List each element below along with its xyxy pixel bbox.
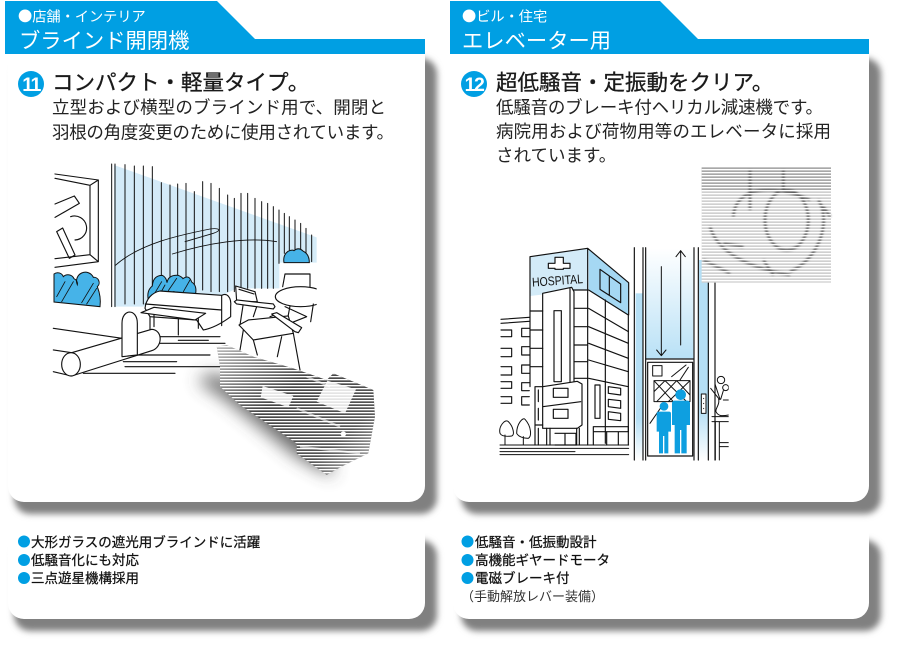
person: adult — [672, 389, 690, 453]
text block: blinds description: 立型および横型のブラインド用で、開閉と — [52, 98, 386, 118]
vertical blinds — [112, 164, 312, 307]
striped motor image — [702, 167, 831, 283]
heading: compact and light: コンパクト・軽量タイプ。 — [52, 71, 309, 95]
window reflections — [115, 229, 277, 266]
armchair — [234, 286, 302, 370]
side building — [501, 317, 529, 405]
feature list: blinds: 三点遊星機構採用 — [31, 571, 139, 586]
header: elevator: エレベーター用 — [462, 29, 611, 53]
text block: elevator description: 低騒音のブレーキ付ヘリカル減速機です。 — [496, 98, 823, 118]
heading: ultra low noise: 超低騒音・定振動をクリア。 — [496, 71, 773, 95]
trees and ground — [500, 419, 629, 455]
text block: elevator description: されています。 — [496, 146, 616, 166]
panel: shadow of elevator card — [461, 58, 881, 514]
header: elevator: ●ビル・住宅 — [462, 6, 547, 26]
foreground sofa — [53, 312, 160, 376]
feature list: elevator: 低騒音・低振動設計 — [475, 534, 597, 550]
call button — [701, 394, 706, 413]
motor soft shadow — [197, 373, 333, 477]
person: child — [657, 402, 671, 453]
elevator shaft — [634, 248, 715, 460]
panel: blinds card — [8, 50, 425, 502]
feature list: blinds: 低騒音化にも対応 — [31, 552, 139, 568]
elevator car interior — [650, 365, 690, 423]
center sofa and table — [83, 291, 231, 373]
badge: number 12: 12 — [465, 74, 485, 96]
plants — [54, 249, 309, 307]
geared motor — [217, 345, 375, 475]
text block: blinds description — [52, 98, 394, 142]
feature list: elevator: 高機能ギヤードモータ — [475, 552, 610, 568]
right window, vase and table — [710, 376, 729, 460]
shaft side tint — [699, 260, 709, 460]
shaft left tint — [636, 293, 643, 460]
panel: shadow of blinds card — [14, 58, 437, 514]
feature list: elevator: 電磁ブレーキ付 — [475, 570, 570, 586]
feature list: blinds: 大形ガラスの遮光用ブラインドに活躍 — [31, 534, 260, 550]
panel: blinds features card — [8, 522, 425, 619]
hospital side tint — [589, 249, 629, 315]
feature list: elevator: （手動解放レバー装備） — [461, 589, 604, 604]
header: blinds: ブラインド開閉機 — [19, 29, 189, 53]
badge: number 12 — [461, 71, 487, 97]
header: blinds — [5, 1, 425, 54]
elevator shaft tint — [645, 248, 693, 358]
direction arrows — [657, 251, 685, 356]
round table and far chair — [274, 273, 317, 322]
hospital building — [530, 248, 629, 445]
panel: elevator card — [453, 50, 869, 502]
feature list: blinds — [18, 534, 260, 586]
text block: elevator description — [496, 98, 831, 166]
hospital name: HOSPITAL — [532, 272, 583, 290]
feature list: elevator — [461, 534, 610, 604]
hospital sign tint — [530, 248, 588, 296]
illustration: hospital and elevator — [500, 167, 831, 460]
header: elevator — [450, 1, 869, 54]
panel: shadow of elevator features card — [461, 540, 881, 631]
badge: number 11: 11 — [22, 74, 41, 96]
panel: shadow of blinds features card — [14, 540, 437, 631]
text block: blinds description: 羽根の角度変更のために使用されています。 — [52, 122, 394, 142]
badge: number 11 — [18, 71, 44, 97]
header: blinds: ●店舗・インテリア — [18, 6, 146, 26]
illustration: lobby with blinds and motor — [53, 164, 375, 477]
window tint — [114, 165, 317, 307]
panel: elevator features card — [453, 522, 869, 619]
wall painting — [55, 174, 98, 267]
text block: elevator description: 病院用および荷物用等のエレベータに採用 — [496, 122, 831, 142]
